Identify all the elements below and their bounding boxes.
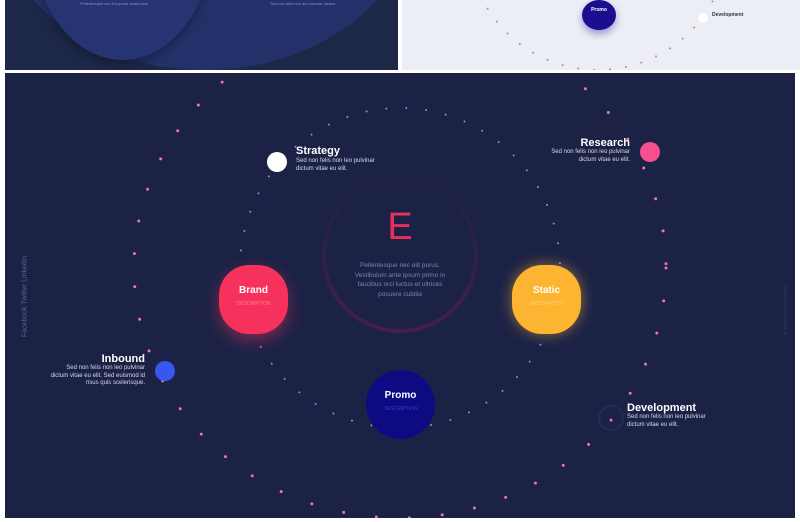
- promo circle: Promo: [591, 7, 607, 13]
- center E: E: [387, 206, 413, 248]
- node: Promo: Promo: [385, 390, 416, 401]
- node: Brand: Brand: [239, 285, 268, 296]
- item: Inbound: Inbound: [102, 353, 145, 365]
- panel: top-left preview: Sed non felis non leo pulvinar dictum: [270, 1, 335, 6]
- node: Brand: [219, 265, 288, 334]
- item: Research: [551, 137, 660, 162]
- node: Promo: DESCRIPTION: [383, 406, 418, 412]
- development: [698, 13, 708, 23]
- node: Promo: [366, 370, 435, 439]
- item: Strategy: Strategy: [296, 145, 340, 157]
- node: Static: DESCRIPTION: [529, 301, 564, 307]
- item: Development: Development: [627, 402, 696, 414]
- panel: top-left preview: [5, 0, 398, 70]
- item: Research: Sed non felis non leo pulvinar dictum vitae eu elit.: [551, 149, 630, 162]
- node: Static: Static: [533, 285, 560, 296]
- item: Inbound: Sed non felis non leo pulvinar dictum vitae eu elit. Sed euismod id risus quis scelerisque.: [51, 365, 145, 386]
- item: Strategy: Sed non felis non leo pulvinar dictum vitae eu elit.: [296, 158, 375, 172]
- item: Research: Research: [580, 137, 630, 149]
- social text: Facebook Twitter Linkedin: [22, 256, 28, 337]
- panel: top-right preview: [402, 0, 800, 70]
- panel: top-right preview: Development: [712, 12, 743, 18]
- item: Development: Sed non felis non leo pulvinar dictum vitae eu elit.: [627, 414, 706, 428]
- node: Brand: DESCRIPTION: [236, 301, 271, 307]
- item: Inbound: [50, 353, 175, 386]
- item: Strategy: [267, 145, 375, 172]
- concentric circles: [0, 0, 415, 70]
- item: Development: [598, 402, 706, 431]
- promo circle: [582, 0, 616, 30]
- preview text: Pellentesque nec elit purus vestibulum: [80, 1, 148, 6]
- panel: main: All rights reserved 2018 info: [782, 286, 788, 336]
- center text: Pellentesque nec elit purus. Vestibulum ante ipsum primo in faucibus orci luctus et ultrices posuere cubilia: [355, 262, 445, 298]
- node: Static: [512, 265, 581, 334]
